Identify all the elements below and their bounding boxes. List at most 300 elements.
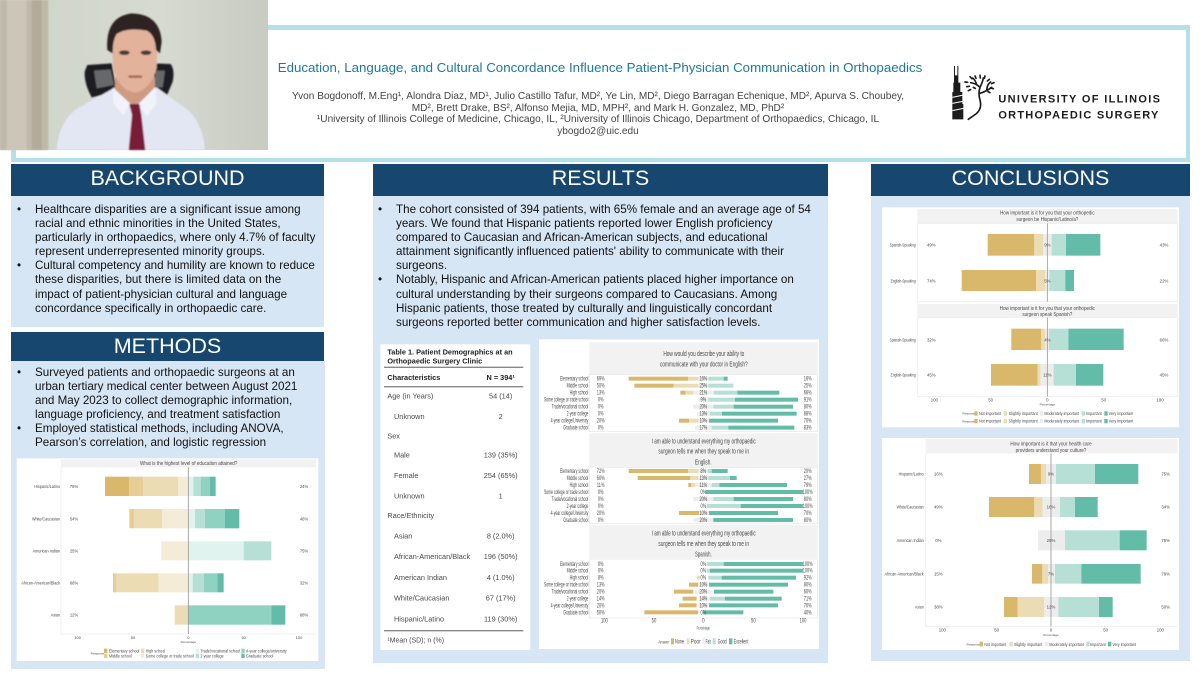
legends: Important — [1086, 419, 1102, 424]
right percentages: English ability: 91% — [804, 397, 812, 404]
row labels and percentages: 49% — [927, 243, 936, 248]
row labels and percentages: 45% — [927, 373, 936, 378]
row labels: understanding in Spanish: 2-year college — [567, 597, 589, 603]
right percentages: English ability — [804, 376, 812, 432]
bars: speak Spanish question — [991, 329, 1124, 386]
row labels: understanding in Spanish: Some college or trade school — [544, 583, 588, 589]
table rows: Asian — [394, 531, 412, 540]
legend: Slightly important — [1014, 642, 1043, 647]
left percentages: understanding in Spanish: 13% — [597, 582, 605, 589]
row labels: English ability: High school — [570, 391, 588, 397]
center percentages: understanding in English: 20% — [699, 517, 708, 524]
right percentages: understanding in Spanish — [803, 561, 813, 617]
left percentages: English ability — [597, 376, 605, 432]
poster title: Education, Language, and Cultural Concordance Influence Patient-Physician Communication in Orthopaedics — [278, 60, 922, 75]
strip: English ability question: How would you describe your ability to — [663, 349, 744, 358]
axis ticks: 50 — [1101, 397, 1107, 402]
row labels: understanding in English: Graduate school — [563, 518, 588, 524]
logo: University of Illinois Orthopaedic Surgery — [952, 66, 1160, 122]
methods bullet text: language proficiency, and treatment satisfaction — [35, 408, 280, 421]
legend: Moderately important — [1049, 642, 1085, 647]
right percentages: understanding in English: 80% — [804, 496, 812, 503]
axis ticks — [74, 635, 303, 644]
percentages: 68% — [70, 580, 78, 585]
row labels and percentages: 9% — [1044, 243, 1051, 248]
row labels and percentages: 74% — [927, 278, 936, 283]
row labels — [21, 484, 61, 618]
strip: culture question: How important is it that your health care — [1010, 442, 1092, 448]
stacked bars: understanding in Spanish — [644, 562, 803, 614]
row labels and percentages: 45% — [1160, 373, 1168, 378]
icon: skyline tower — [952, 66, 963, 119]
center percentages: understanding in English — [699, 468, 708, 524]
axis ticks: 50 — [1103, 628, 1109, 633]
legend: Poor — [691, 639, 701, 645]
row labels: understanding in English: Elementary school — [560, 469, 588, 475]
row labels: English ability: Graduate school — [563, 426, 588, 432]
authors and affiliations: ybogdo2@uic.edu — [557, 126, 639, 137]
row labels: Hispanic/Latino — [34, 484, 60, 489]
row labels and percentages: 9% — [1048, 472, 1054, 477]
left percentages: understanding in English: 0% — [598, 503, 604, 510]
right percentages: understanding in Spanish: 80% — [804, 582, 812, 589]
strip: culture question — [926, 439, 1177, 454]
background heading: BACKGROUND — [90, 166, 245, 190]
row labels: understanding in Spanish: Elementary school — [560, 562, 588, 568]
panel: conclusions — [871, 164, 1190, 661]
axis ticks: 50 — [131, 635, 136, 640]
left percentages: understanding in English: 11% — [597, 482, 605, 489]
right percentages: understanding in English — [803, 468, 813, 524]
right percentages: understanding in English: 20% — [804, 468, 812, 475]
methods bullet text — [18, 366, 297, 449]
row labels and percentages: 11% — [1043, 373, 1052, 378]
strip: English ability question: communicate with your doctor in English? — [660, 359, 748, 368]
table rows: Unknown — [394, 492, 425, 501]
left percentages: understanding in Spanish: 0% — [598, 561, 604, 568]
conclusions heading: CONCLUSIONS — [952, 166, 1109, 190]
panel: results — [373, 164, 828, 663]
background bullet text: represent underrepresented minority groups. — [35, 245, 265, 258]
center percentages: understanding in Spanish: 0% — [701, 575, 707, 582]
row labels and percentages: 15% — [934, 571, 943, 576]
left percentages: understanding in Spanish: 50% — [597, 610, 605, 617]
legend: Graduate school — [246, 653, 273, 658]
row labels and percentages: 79% — [1161, 571, 1170, 576]
bar: Asian — [175, 605, 285, 625]
strip: Hispanic/Latino question: surgeon be Hispanic/Latino/a? — [1016, 217, 1079, 223]
left percentages: understanding in English: 0% — [598, 496, 604, 503]
row labels and percentages: 5% — [1044, 278, 1051, 283]
row labels and percentages: 50% — [1161, 605, 1170, 610]
legends: Moderately important — [1044, 411, 1080, 416]
row labels and percentages: 25% — [1047, 538, 1055, 543]
percentages — [70, 484, 308, 618]
row labels: White/Caucasian — [32, 516, 60, 521]
percentages: 75% — [300, 548, 308, 553]
legend: Fair — [706, 639, 711, 645]
row labels and percentages: White/Caucasian — [897, 505, 924, 510]
center percentages: understanding in Spanish: 10% — [699, 582, 708, 589]
right percentages: English ability: 80% — [804, 404, 812, 411]
strip: culture question: providers understand your culture? — [1016, 448, 1087, 454]
results panel body — [373, 196, 828, 663]
row labels: understanding in Spanish: Middle school — [567, 569, 588, 575]
legend: Answer — [658, 639, 670, 644]
strip: understanding in English question — [589, 433, 818, 468]
chart: importance of providers understanding culture — [882, 438, 1179, 650]
authors and affiliations: ¹University of Illinois College of Medicine, Chicago, IL, ²University of Illinois Chicago, Department of Orthopaedics, Chicago, IL — [317, 114, 879, 125]
table rows: 54 (14) — [489, 391, 512, 400]
strip: understanding in Spanish question: I am able to understand everything my orthopaedic — [652, 529, 756, 538]
left percentages: understanding in English: 0% — [598, 517, 604, 524]
legend: Important — [1090, 642, 1106, 647]
authors and affiliations: Yvon Bogdonoff, M.Eng¹, Alondra Diaz, MD¹, Julio Castillo Tafur, MD², Ye Lin, MD², Diego Barragan Echenique, MD², Apurva S. Choubey, — [292, 91, 904, 102]
legends: Slightly important — [1009, 419, 1038, 424]
center percentages: understanding in English: 8% — [701, 468, 707, 475]
table rows: Race/Ethnicity — [387, 511, 435, 520]
legends: Not important — [979, 419, 1002, 424]
row labels and percentages: 22% — [1160, 278, 1168, 283]
left percentages: understanding in Spanish: 8% — [598, 575, 604, 582]
strip: understanding in English question: surgeon tells me when they speak to me in — [658, 447, 749, 456]
axis ticks: Percentage — [1043, 633, 1059, 637]
axis ticks: 0 — [702, 619, 705, 625]
table rows: 8 (2.0%) — [487, 531, 515, 540]
methods bullet text: and May 2023 to collect demographic information, — [35, 394, 292, 407]
left percentages: understanding in English: 72% — [597, 468, 605, 475]
center percentages: understanding in Spanish: 14% — [699, 596, 708, 603]
center percentages: English ability: 25% — [699, 383, 708, 390]
axis ticks: 100 — [800, 619, 807, 625]
legend: Some college or trade school — [146, 653, 194, 658]
axis ticks: Percentage — [1040, 402, 1055, 406]
row labels: understanding in English: 4-year college/University — [551, 511, 588, 517]
left percentages: understanding in English — [597, 468, 605, 524]
legends: Very important — [1109, 411, 1134, 416]
center percentages: English ability: 17% — [699, 425, 708, 432]
row labels and percentages — [885, 472, 1170, 610]
right percentages: English ability: 66% — [804, 390, 812, 397]
chart: communication ability by education level — [539, 339, 819, 649]
row labels: understanding in English: Trade/vocational school — [552, 497, 588, 503]
legend: Response — [91, 651, 105, 655]
background bullet text: Cultural competency and humility are known to reduce — [35, 259, 315, 272]
chart: importance of surgeon being Hispanic/Latino and speaking Spanish — [882, 207, 1179, 428]
methods heading — [11, 332, 324, 361]
left percentages: understanding in English: 0% — [598, 489, 604, 496]
table rows: Male — [394, 450, 410, 459]
legend — [658, 638, 749, 645]
table title — [387, 347, 513, 365]
background bullet text: particularly in orthopaedics, where only 4.7% of faculty — [35, 231, 315, 244]
legend: Trade/vocational school — [200, 648, 240, 653]
legends: Response — [962, 412, 976, 416]
right percentages: understanding in Spanish: 60% — [804, 589, 812, 596]
row labels and percentages: 12% — [1047, 605, 1055, 610]
axis ticks: 100 — [1156, 397, 1164, 402]
left percentages: English ability: 50% — [597, 383, 605, 390]
right percentages: understanding in Spanish: 71% — [804, 596, 812, 603]
methods heading: METHODS — [114, 334, 221, 358]
axis ticks: 50 — [652, 619, 657, 625]
row labels: African-American/Black — [21, 580, 61, 585]
legend: Response — [967, 643, 981, 647]
right percentages: understanding in English: 100% — [803, 489, 813, 496]
right percentages: understanding in Spanish: 100% — [803, 568, 813, 575]
right percentages: English ability: 16% — [804, 376, 812, 383]
left percentages: understanding in Spanish: 14% — [597, 596, 605, 603]
logo wordmark — [998, 93, 1160, 122]
center percentages: understanding in English: 20% — [699, 496, 708, 503]
table rows: Age (in Years) — [387, 391, 433, 400]
legends: Moderately important — [1044, 419, 1080, 424]
legends — [962, 411, 1134, 424]
logo wordmark: ORTHOPAEDIC SURGERY — [998, 110, 1159, 122]
row labels: understanding in Spanish — [544, 562, 589, 616]
legend: High school — [146, 648, 165, 653]
axis ticks — [931, 397, 1164, 406]
table rows — [387, 391, 518, 623]
bars: Hispanic/Latino question — [962, 234, 1100, 291]
row labels and percentages: Hispanic/Latino — [899, 472, 924, 477]
chart: highest level of education attained: What is the highest level of education attained? — [140, 461, 238, 467]
row labels and percentages: 75% — [1161, 538, 1170, 543]
percentages: 25% — [70, 548, 78, 553]
row labels and percentages: African-American/Black — [885, 571, 924, 576]
legend: Excellent — [734, 639, 749, 645]
logo wordmark: UNIVERSITY OF ILLINOIS — [998, 93, 1160, 105]
strip: understanding in English question: I am able to understand everything my orthopaedic — [652, 436, 756, 445]
left percentages: understanding in Spanish — [597, 561, 605, 617]
center percentages: understanding in Spanish: 0% — [701, 610, 707, 617]
center percentages: understanding in Spanish: 0% — [701, 568, 707, 575]
stacked bars: understanding in English — [629, 469, 803, 522]
methods bullet text: Surveyed patients and orthopaedic surgeons at an — [35, 366, 295, 379]
axis ticks — [601, 619, 807, 630]
left percentages: English ability: 0% — [598, 425, 604, 432]
center percentages: understanding in Spanish: 20% — [699, 589, 708, 596]
percentages: 24% — [300, 484, 308, 489]
table rows: American Indian — [394, 573, 447, 582]
right percentages: understanding in English: 79% — [804, 482, 812, 489]
left percentages: English ability: 0% — [598, 397, 604, 404]
axis ticks: 100 — [939, 628, 947, 633]
table rows: 119 (30%) — [484, 614, 517, 623]
results heading: RESULTS — [552, 166, 649, 190]
axis ticks: 0 — [187, 635, 190, 640]
stacked bars: English ability — [629, 377, 798, 430]
authors and affiliations: MD², Brett Drake, BS², Alfonso Mejia, MD, MPH², and Mark H. Gonzalez, MD, PhD² — [412, 103, 784, 114]
axis ticks: 100 — [296, 635, 303, 640]
table 1: patient demographics — [380, 344, 530, 650]
row labels and percentages: 34% — [1161, 505, 1170, 510]
left percentages: English ability: 69% — [597, 376, 605, 383]
background bullet text: these disparities, but there is limited data on the — [35, 273, 281, 286]
strip: English ability question — [589, 342, 818, 374]
row labels and percentages: 16% — [934, 472, 943, 477]
center percentages: understanding in English: 0% — [701, 503, 707, 510]
legend: Not important — [984, 642, 1007, 647]
right percentages: understanding in Spanish: 92% — [804, 575, 812, 582]
table rows: 254 (65%) — [484, 471, 518, 480]
results bullet text: surgeons reported better communication and higher satisfaction levels. — [396, 316, 760, 329]
row labels: English ability: Trade/vocational school — [552, 405, 588, 411]
background bullet text: concordance specifically in orthopaedic care. — [35, 302, 266, 315]
right percentages: understanding in Spanish: 40% — [804, 610, 812, 617]
right percentages: understanding in Spanish: 70% — [804, 603, 812, 610]
legend: Middle school — [109, 653, 132, 658]
panel: background — [11, 164, 324, 327]
authors and affiliations — [292, 91, 904, 137]
table rows: Hispanic/Latino — [394, 614, 444, 623]
center percentages: English ability: 13% — [699, 411, 708, 418]
results bullet text — [378, 203, 811, 329]
results bullet text: compared to Caucasian and African-American subjects, and educational — [396, 231, 768, 244]
bar: Hispanic/Latino — [105, 477, 216, 496]
center percentages: understanding in Spanish: 10% — [699, 603, 708, 610]
row labels and percentages: Spanish-Speaking — [890, 243, 916, 248]
row labels and percentages: Spanish-Speaking — [890, 337, 916, 342]
row labels and percentages: English-Speaking — [891, 373, 916, 378]
methods bullet text: Employed statistical methods, including ANOVA, — [35, 422, 284, 435]
row labels and percentages: American Indian — [897, 538, 924, 543]
left percentages: understanding in Spanish: 0% — [598, 568, 604, 575]
background bullet text: impact of patient-physician cultural and language — [35, 288, 287, 301]
table title: Table 1. Patient Demographics at an — [387, 347, 513, 356]
right percentages: understanding in English: 100% — [803, 503, 813, 510]
center percentages: understanding in English: 0% — [701, 489, 707, 496]
row labels and percentages: 32% — [927, 337, 936, 342]
row labels: Asian — [51, 613, 60, 618]
legends: Response — [962, 419, 976, 423]
row labels and percentages: 7% — [1048, 571, 1054, 576]
table rows: 1 — [499, 492, 503, 501]
background panel body — [11, 196, 324, 327]
left percentages: understanding in Spanish: 20% — [597, 603, 605, 610]
right percentages: understanding in Spanish: 100% — [803, 561, 813, 568]
percentages: 88% — [300, 613, 308, 618]
legend: 2-year college — [200, 653, 224, 658]
right percentages: English ability: 25% — [804, 383, 812, 390]
legends: Important — [1086, 411, 1102, 416]
table rows: 4 (1.0%) — [487, 573, 515, 582]
row labels: understanding in English: 2-year college — [567, 504, 589, 510]
legends: Very important — [1109, 419, 1134, 424]
results bullet text: cultural understanding by their surgeons compared to Caucasians. Among — [396, 288, 777, 301]
center percentages: understanding in English: 11% — [700, 482, 707, 489]
legends: Not important — [979, 411, 1002, 416]
conclusions panel body — [871, 196, 1190, 661]
table rows: 139 (35%) — [484, 450, 518, 459]
left percentages: understanding in English: 20% — [597, 510, 605, 517]
row labels and percentages: 16% — [1047, 505, 1055, 510]
table rows: Sex — [387, 431, 400, 440]
row labels: understanding in English — [544, 469, 589, 524]
legend — [967, 642, 1137, 647]
left percentages: English ability: 0% — [598, 411, 604, 418]
left percentages: understanding in English: 60% — [597, 475, 605, 482]
row labels and percentages — [890, 243, 1168, 378]
bars: culture question — [989, 464, 1147, 617]
strip: Hispanic/Latino question — [917, 209, 1177, 223]
table rows: 196 (50%) — [484, 552, 518, 561]
row labels and percentages: Asian — [915, 605, 924, 610]
row labels: English ability: Middle school — [567, 384, 588, 390]
axis ticks: Percentage — [697, 625, 710, 630]
row labels: English ability — [544, 377, 589, 432]
table header row: Characteristics — [387, 373, 440, 382]
table rows: 67 (17%) — [486, 594, 516, 603]
table header row — [387, 373, 515, 382]
chart: highest level of education attained — [16, 458, 318, 661]
bar: American Indian — [161, 541, 271, 560]
header white panel — [16, 30, 1186, 158]
left percentages: understanding in Spanish: 20% — [597, 589, 605, 596]
results bullet text: The cohort consisted of 394 patients, with 65% female and an average age of 54 — [396, 203, 811, 216]
background bullet text: racial and ethnic minorities in the United States, — [35, 217, 281, 230]
row labels and percentages: English-Speaking — [891, 278, 916, 283]
results heading — [373, 164, 828, 196]
row labels and percentages: 0% — [935, 538, 942, 543]
icon: tree — [965, 75, 994, 119]
left percentages: English ability: 0% — [598, 404, 604, 411]
strip: understanding in Spanish question — [589, 525, 818, 559]
percentages: 12% — [70, 613, 78, 618]
panel: methods — [11, 332, 325, 669]
table header row: N = 394¹ — [487, 373, 515, 382]
row labels: understanding in English: Some college or trade school — [544, 490, 588, 496]
axis ticks — [939, 628, 1165, 637]
methods bullet text: urban tertiary medical center between August 2021 — [35, 380, 297, 393]
center percentages: understanding in Spanish — [699, 561, 708, 617]
percentages: 32% — [300, 580, 308, 585]
row labels: understanding in English: Middle school — [567, 476, 588, 482]
left percentages: English ability: 20% — [597, 418, 605, 425]
right percentages: English ability: 88% — [804, 411, 812, 418]
table rows: Unknown — [394, 412, 425, 421]
strip: speak Spanish question — [917, 304, 1177, 318]
row labels: understanding in English: High school — [570, 483, 588, 489]
background bullet text — [18, 203, 316, 315]
methods panel body — [11, 361, 325, 669]
center percentages: English ability: 9% — [701, 397, 707, 404]
axis ticks: 50 — [988, 397, 994, 402]
bar: African-American/Black — [113, 573, 224, 592]
table rows: 2 — [499, 412, 503, 421]
center percentages: understanding in English: 10% — [699, 510, 708, 517]
row labels and percentages: 49% — [934, 505, 943, 510]
row labels and percentages: 4% — [1044, 337, 1051, 342]
row labels: English ability: Elementary school — [560, 377, 588, 383]
center percentages: English ability: 21% — [699, 390, 708, 397]
table title: Orthopaedic Surgery Clinic — [387, 356, 482, 365]
center percentages: understanding in Spanish: 0% — [701, 561, 707, 568]
row labels and percentages: 66% — [1160, 337, 1168, 342]
right percentages: English ability: 83% — [804, 425, 812, 432]
results bullet text: attainment significantly influenced patients' ability to communicate with their — [396, 245, 784, 258]
row labels: understanding in Spanish: Graduate school — [563, 610, 588, 616]
table rows: Female — [394, 471, 418, 480]
row labels: English ability: 4-year college/University — [551, 419, 588, 425]
axis ticks: 0 — [1050, 628, 1053, 633]
results bullet text: surgeons. — [396, 259, 447, 272]
axis ticks: 100 — [74, 635, 82, 640]
legend: Elementary school — [109, 648, 139, 653]
row labels and percentages: 75% — [1161, 472, 1170, 477]
table rows: African-American/Black — [394, 552, 470, 561]
legend: Good — [718, 639, 727, 645]
